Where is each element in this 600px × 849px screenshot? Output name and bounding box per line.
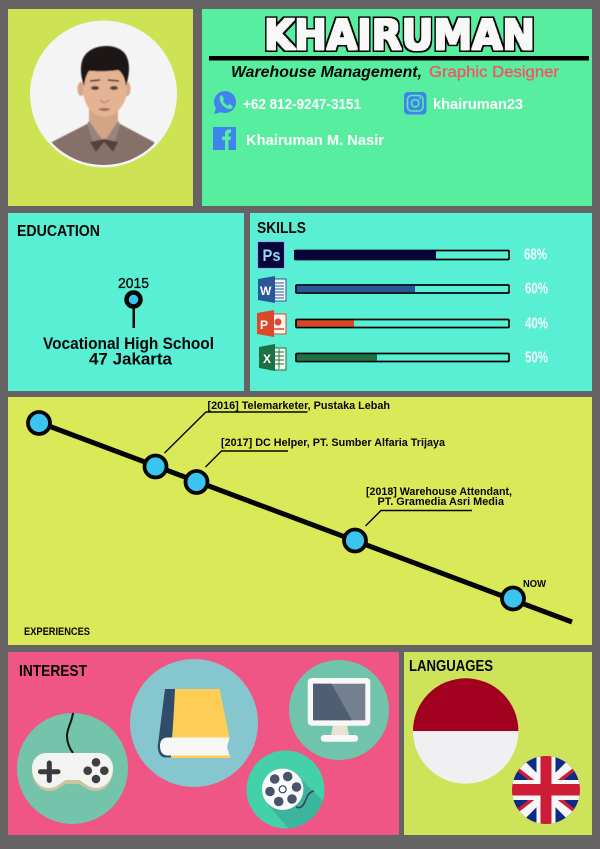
icon: timeline pin (126, 292, 140, 328)
panel: interest (8, 652, 399, 835)
icon: game controller (17, 713, 128, 824)
callout: 2016: [2016] Telemarketer, Pustaka Lebah (208, 400, 390, 412)
icon: excel (259, 344, 286, 371)
header divider (209, 56, 589, 60)
timeline markers (28, 412, 524, 610)
job titles (231, 64, 560, 81)
icon: indonesia flag (413, 678, 519, 785)
education heading: EDUCATION (17, 223, 100, 240)
portrait photo (30, 20, 177, 170)
skill: photoshop (258, 242, 547, 268)
icon: powerpoint (257, 310, 286, 337)
skill: powerpoint (257, 310, 548, 337)
panel: header (202, 9, 592, 206)
job titles: Graphic Designer (429, 64, 560, 81)
icon: book (130, 659, 258, 787)
icon: instagram (404, 92, 426, 114)
value: 50%: 50% (525, 350, 548, 366)
icon: film reel (246, 750, 324, 828)
panel: languages (404, 652, 592, 835)
bar: word 60% (296, 285, 509, 293)
phone number: +62 812-9247-3151 (243, 96, 361, 113)
icon: monitor (289, 660, 389, 760)
callout: 2018: PT. Gramedia Asri Media (378, 496, 505, 508)
bar: photoshop 68% (294, 250, 509, 260)
icon: photoshop: Ps (262, 246, 280, 265)
school name (43, 335, 214, 368)
controller buttons (83, 758, 109, 783)
timeline line (38, 422, 572, 622)
panel: experiences (8, 397, 592, 645)
callout: 2018: [2018] Warehouse Attendant, (366, 486, 512, 498)
callout: 2016 (164, 400, 390, 453)
bar: powerpoint 40% (296, 320, 509, 328)
instagram handle: khairuman23 (433, 96, 523, 113)
icon: word: W (260, 284, 272, 298)
skills heading: SKILLS (257, 220, 306, 237)
panel: photo (8, 9, 193, 206)
skill: excel (259, 344, 548, 371)
callout: now: NOW (523, 578, 546, 590)
education year: 2015 (118, 275, 149, 292)
icon: word (258, 276, 286, 303)
job titles: Warehouse Management, (231, 64, 422, 81)
skill: word (258, 276, 548, 303)
callout: 2017: [2017] DC Helper, PT. Sumber Alfaria Trijaya (221, 437, 446, 449)
icon: uk flag (512, 756, 580, 824)
name title: KHAIRUMAN (264, 10, 535, 60)
experiences heading: EXPERIENCES (24, 626, 90, 638)
interest heading: INTEREST (19, 663, 87, 680)
value: 60%: 60% (525, 280, 548, 298)
callout: 2018 (366, 486, 512, 526)
bar: excel 50% (296, 354, 509, 362)
callout: 2017 (206, 437, 446, 467)
school name: 47 Jakarta (89, 350, 173, 368)
languages heading: LANGUAGES (409, 658, 493, 675)
panel: education (8, 213, 244, 391)
facebook name: Khairuman M. Nasir (246, 132, 384, 149)
icon: excel: X (263, 352, 271, 366)
controller d-pad (40, 763, 58, 780)
icon: photoshop (258, 242, 284, 268)
value: 68%: 68% (524, 246, 547, 264)
panel: skills (250, 213, 592, 391)
icon: whatsapp (214, 91, 236, 114)
value: 40%: 40% (525, 316, 548, 332)
icon: powerpoint: P (260, 318, 268, 332)
school name: Vocational High School (43, 335, 214, 353)
icon: facebook (213, 127, 236, 150)
